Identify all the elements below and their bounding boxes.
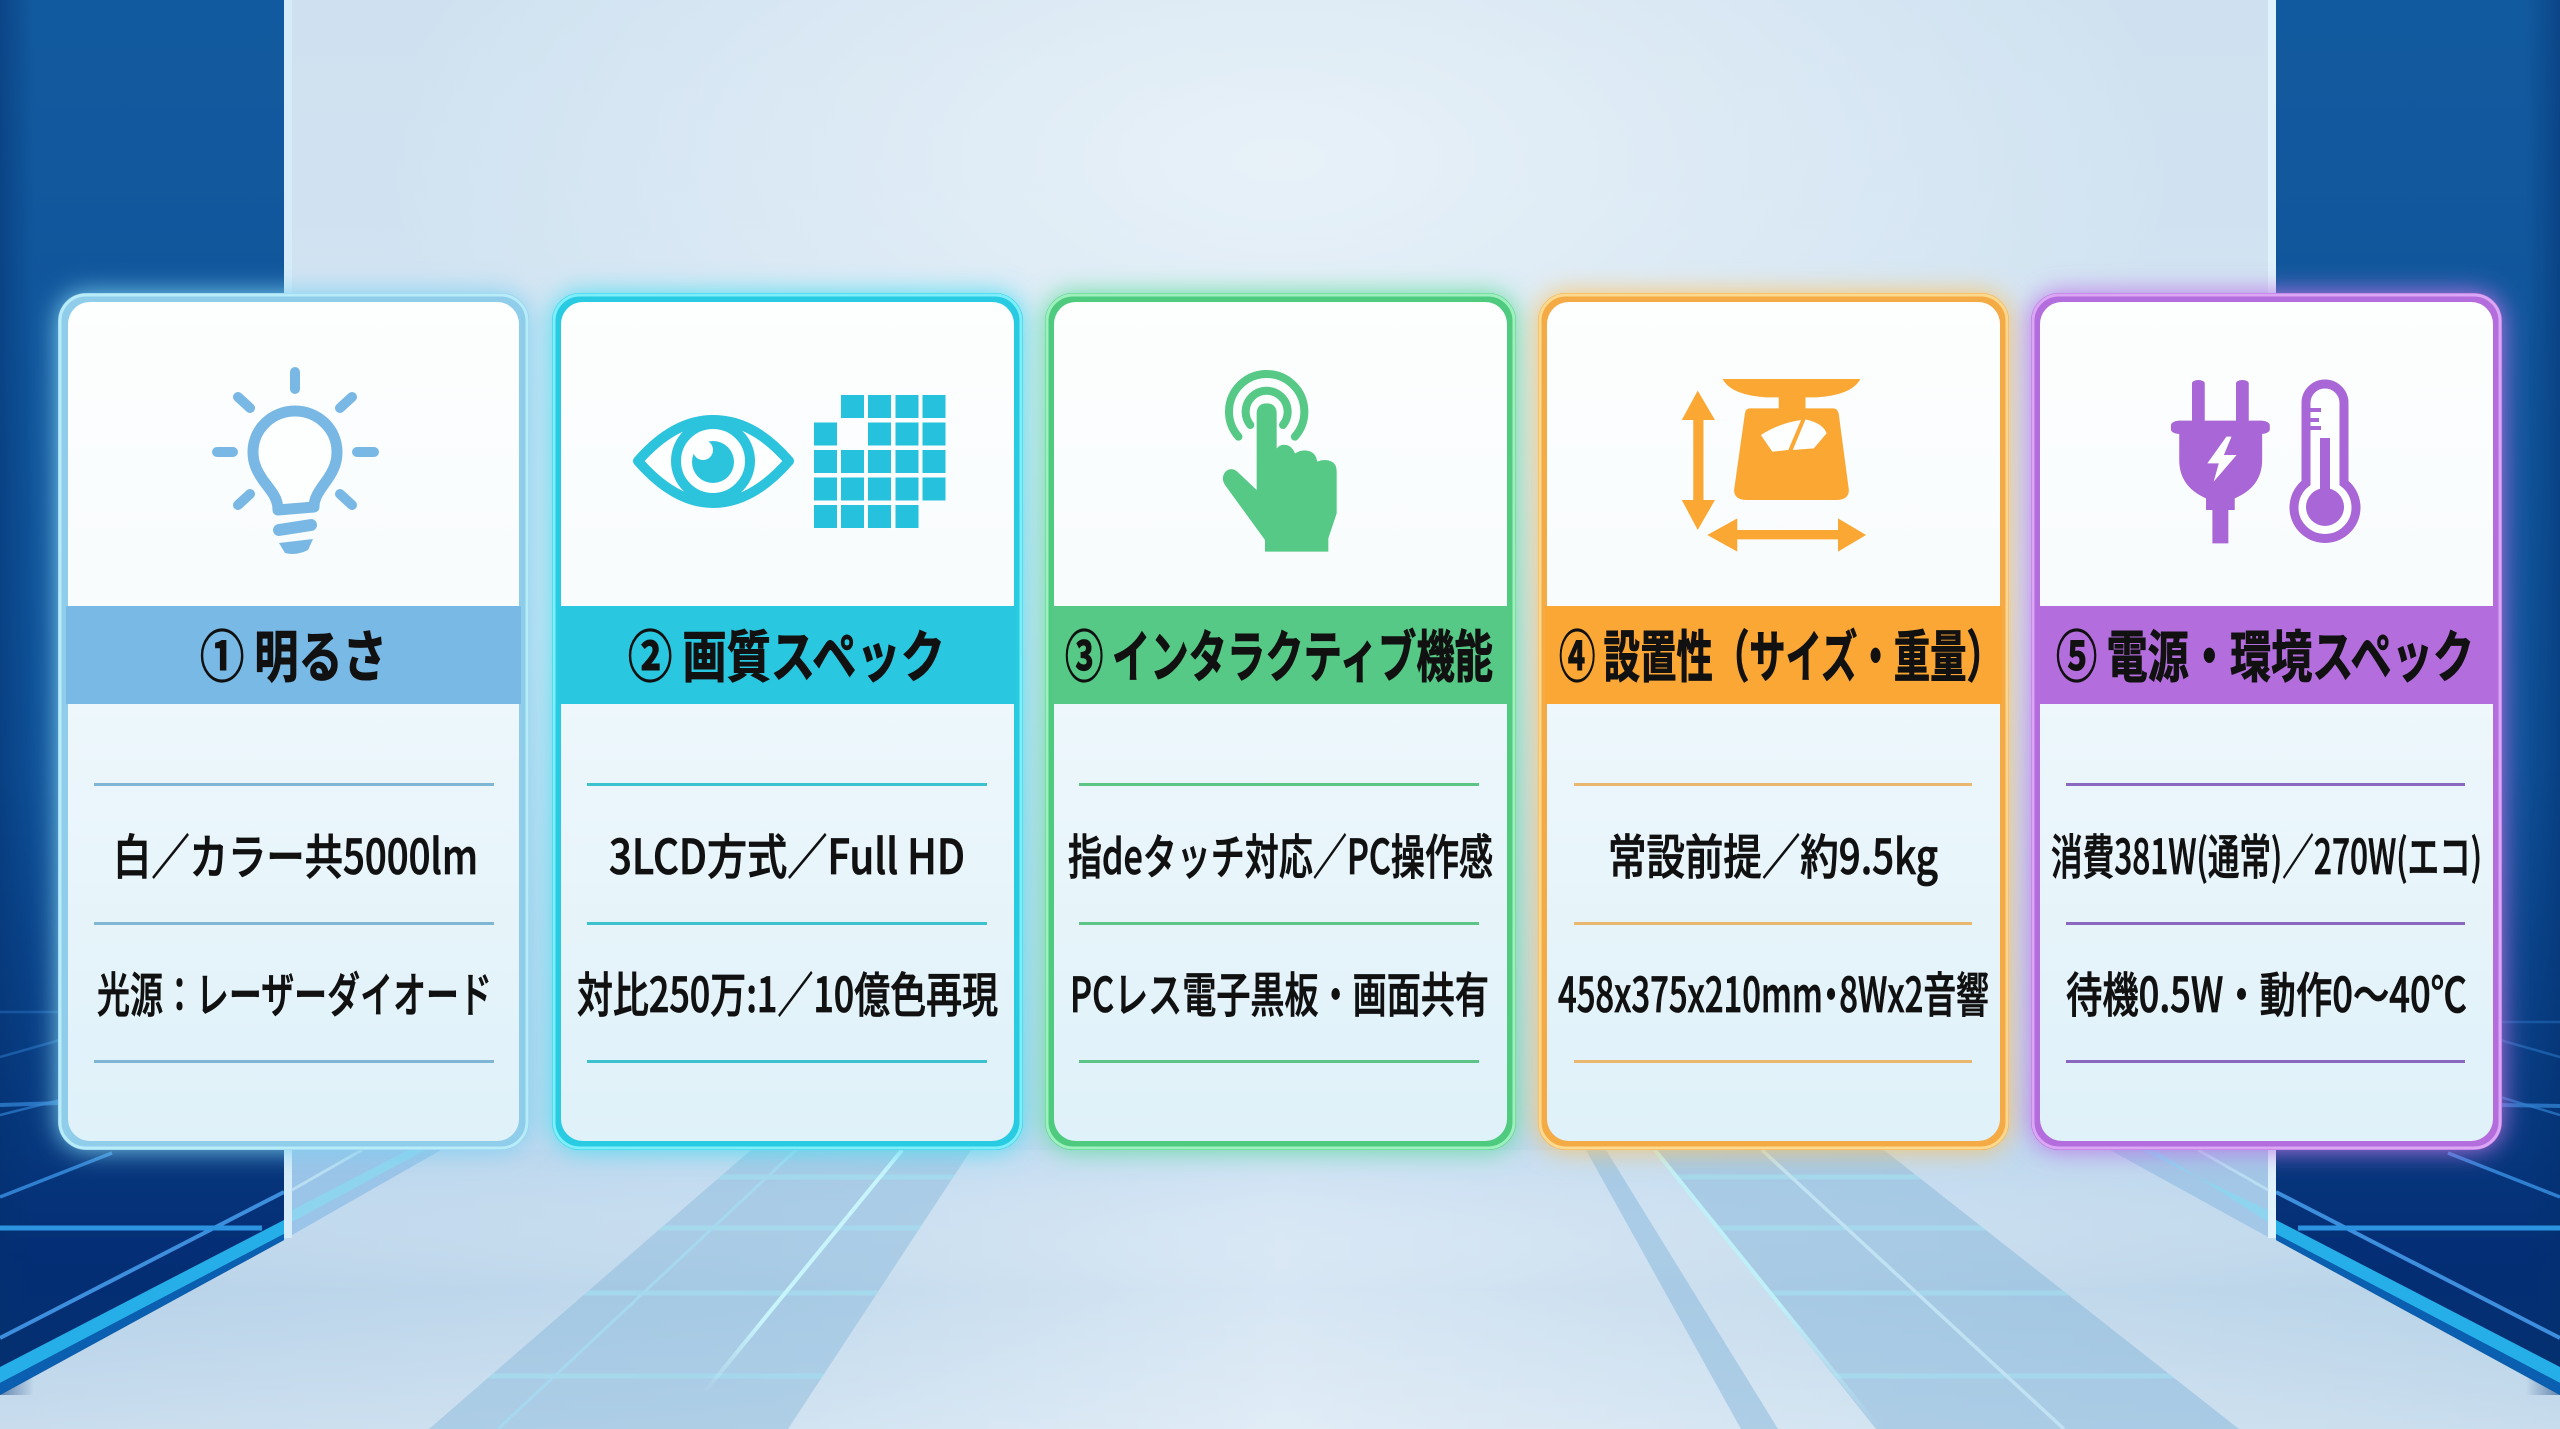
panel: installation, size and weight (1538, 293, 2009, 1150)
heading: brightness: ① 明るさ (200, 613, 387, 694)
panel: image quality (552, 293, 1023, 1150)
left dark grid panel (0, 0, 292, 1395)
spec rows: interactive features: PCレス電子黒板・画面共有 (1070, 956, 1489, 1026)
icon: power plug (2171, 380, 2270, 543)
heading: installation: ④ 設置性（サイズ・重量） (1559, 613, 2003, 694)
spec rows: interactive features: 指deタッチ対応／PC操作感 (1068, 818, 1493, 888)
spec rows: power and environment (2051, 783, 2482, 1063)
heading: image quality: ② 画質スペック (628, 613, 945, 694)
spec rows: brightness (94, 783, 494, 1063)
icon: touch hand (1223, 374, 1337, 552)
icon: thermometer (2294, 384, 2356, 538)
spec rows: installation: 458x375x210mm・8Wx2音響 (1558, 956, 1989, 1026)
right dark grid panel (2268, 0, 2560, 1395)
panel: interactive features (1045, 293, 1516, 1150)
spec rows: image quality: 3LCD方式／Full HD (609, 818, 965, 888)
heading: interactive features: ③ インタラクティブ機能 (1065, 613, 1493, 694)
floor light bands (292, 1150, 2300, 1429)
spec rows: image quality: 対比250万:1／10億色再現 (577, 956, 998, 1026)
spec rows: brightness: 白／カラー共5000lm (113, 818, 478, 888)
spec rows: installation: 常設前提／約9.5kg (1608, 818, 1938, 888)
spec rows: image quality (577, 783, 998, 1063)
spec rows: brightness: 光源：レーザーダイオード (97, 956, 492, 1026)
panel: brightness (58, 293, 529, 1150)
icon: eye and pixel grid (638, 395, 946, 528)
icon: scale and dimension arrows (1682, 379, 1866, 552)
spec rows: installation (1558, 783, 1989, 1063)
panel: power and environment (2031, 293, 2502, 1150)
icon: light bulb (217, 372, 374, 554)
spec rows: interactive features (1068, 783, 1493, 1063)
